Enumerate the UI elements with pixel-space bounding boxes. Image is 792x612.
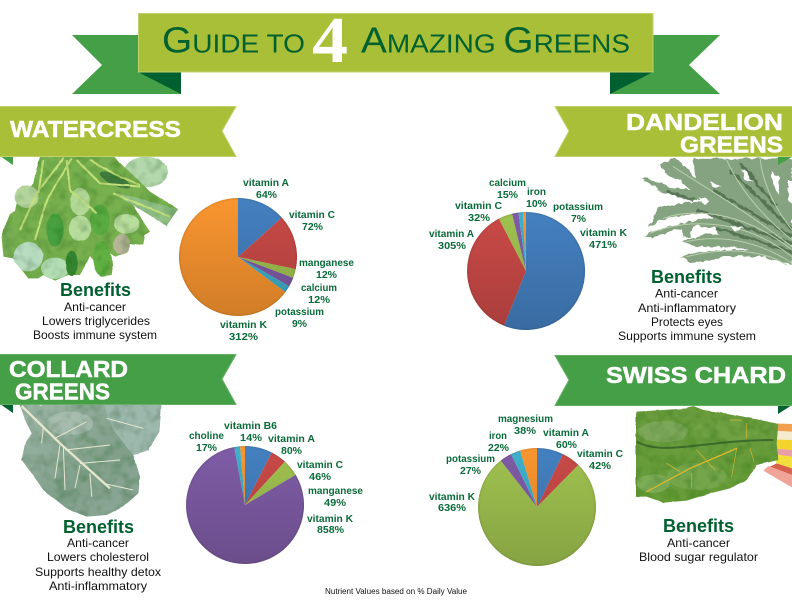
- banner: collard greens: [0, 354, 236, 413]
- title banner: [72, 4, 720, 94]
- banner: dandelion greens: DANDELION: [626, 109, 783, 135]
- pie labels: watercress: 12%: [316, 269, 338, 281]
- pie chart: collard greens: [186, 446, 304, 564]
- pie labels: dandelion greens: potassium: [553, 201, 603, 213]
- pie labels: swiss chard: 42%: [589, 460, 612, 472]
- pie labels: watercress: [220, 177, 354, 343]
- pie labels: dandelion greens: calcium: [489, 177, 526, 189]
- right ribbon tail: [610, 35, 720, 94]
- benefits: dandelion greens: Anti-cancer: [655, 286, 718, 300]
- pie chart: swiss chard: [478, 448, 596, 566]
- benefits: watercress: Lowers triglycerides: [42, 314, 150, 328]
- benefits: swiss chard: [639, 516, 758, 564]
- pie labels: collard greens: vitamin B6: [224, 420, 277, 432]
- photo: watercress: [2, 157, 178, 281]
- pie labels: swiss chard: iron: [489, 430, 507, 442]
- pie labels: collard greens: choline: [189, 430, 224, 442]
- banner: dandelion greens: GREENS: [680, 132, 783, 158]
- pie labels: watercress: vitamin A: [243, 177, 289, 189]
- pie labels: swiss chard: potassium: [446, 453, 495, 465]
- pie labels: watercress: 72%: [302, 221, 324, 233]
- benefits: collard greens: Benefits: [63, 517, 134, 537]
- left ribbon tail: [72, 35, 181, 94]
- pie labels: collard greens: manganese: [308, 485, 363, 497]
- benefits: collard greens: [35, 517, 161, 593]
- title text: [162, 4, 630, 77]
- pie labels: watercress: 312%: [229, 331, 259, 343]
- panel: dandelion greens: [429, 106, 792, 343]
- benefits: watercress: Benefits: [60, 280, 131, 300]
- pie labels: collard greens: vitamin K: [307, 513, 353, 525]
- pie labels: swiss chard: vitamin A: [543, 427, 589, 439]
- pie labels: dandelion greens: [429, 177, 627, 252]
- benefits: watercress: [33, 280, 157, 342]
- title text: GUIDE TO: [162, 20, 305, 60]
- pie labels: dandelion greens: 7%: [571, 213, 587, 225]
- benefits: watercress: Boosts immune system: [33, 328, 157, 342]
- title text: AMAZING GREENS: [361, 20, 630, 60]
- benefits: collard greens: Anti-cancer: [67, 536, 129, 550]
- panel: watercress: [0, 106, 354, 343]
- pie labels: dandelion greens: 10%: [526, 198, 548, 210]
- pie labels: swiss chard: 27%: [460, 465, 482, 477]
- pie labels: watercress: vitamin K: [220, 319, 267, 331]
- pie labels: dandelion greens: 15%: [497, 189, 519, 201]
- benefits: dandelion greens: Supports immune system: [618, 329, 756, 343]
- banner: collard greens: COLLARD: [9, 356, 128, 382]
- benefits: collard greens: Lowers cholesterol: [47, 550, 149, 564]
- pie labels: swiss chard: 636%: [438, 502, 467, 514]
- pie labels: dandelion greens: 305%: [438, 240, 467, 252]
- banner: watercress: [0, 106, 236, 165]
- pie labels: watercress: manganese: [299, 257, 354, 269]
- pie labels: dandelion greens: 32%: [468, 212, 491, 224]
- benefits: swiss chard: Anti-cancer: [667, 536, 730, 550]
- benefits: swiss chard: Blood sugar regulator: [639, 550, 758, 564]
- benefits: dandelion greens: Protects eyes: [651, 315, 723, 329]
- pie labels: watercress: 9%: [292, 318, 308, 330]
- pie chart: watercress: [179, 198, 297, 316]
- photo: collard greens: [20, 405, 161, 517]
- photo: dandelion greens: [642, 158, 792, 265]
- benefits: collard greens: Anti-inflammatory: [49, 579, 147, 593]
- pie labels: collard greens: vitamin C: [297, 459, 343, 471]
- panel: collard greens: [0, 354, 363, 593]
- banner: swiss chard: SWISS CHARD: [606, 362, 786, 388]
- pie labels: dandelion greens: 471%: [589, 239, 618, 251]
- icon: coloured stems: [763, 423, 792, 487]
- pie labels: watercress: calcium: [301, 282, 337, 294]
- benefits: watercress: Anti-cancer: [64, 300, 126, 314]
- pie labels: dandelion greens: vitamin A: [429, 228, 474, 240]
- title text: 4: [312, 4, 348, 77]
- pie labels: swiss chard: vitamin K: [429, 491, 475, 503]
- title plate: [138, 14, 653, 72]
- pie labels: collard greens: 49%: [324, 497, 347, 509]
- photo: swiss chard: [636, 406, 792, 503]
- pie labels: swiss chard: magnesium: [498, 413, 553, 425]
- pie labels: watercress: 64%: [256, 189, 278, 201]
- pie labels: swiss chard: 38%: [514, 425, 537, 437]
- pie labels: watercress: 12%: [308, 294, 331, 306]
- pie labels: collard greens: 80%: [281, 445, 303, 457]
- pie labels: collard greens: 17%: [196, 442, 218, 454]
- pie labels: swiss chard: 60%: [556, 439, 578, 451]
- pie labels: collard greens: 858%: [317, 524, 345, 536]
- pie labels: dandelion greens: iron: [527, 186, 546, 198]
- banner: watercress: WATERCRESS: [10, 116, 181, 142]
- pie labels: collard greens: 46%: [309, 471, 332, 483]
- pie labels: swiss chard: vitamin C: [577, 448, 623, 460]
- pie labels: collard greens: vitamin A: [268, 433, 315, 445]
- pie labels: dandelion greens: vitamin K: [580, 227, 627, 239]
- pie labels: watercress: potassium: [275, 306, 324, 318]
- pie labels: swiss chard: [429, 413, 623, 514]
- benefits: dandelion greens: Anti-inflammatory: [638, 301, 736, 315]
- benefits: collard greens: Supports healthy detox: [35, 565, 161, 579]
- benefits: swiss chard: Benefits: [663, 516, 734, 536]
- pie labels: collard greens: 14%: [240, 432, 263, 444]
- pie labels: swiss chard: 22%: [488, 442, 510, 454]
- pie labels: collard greens: [189, 420, 363, 536]
- footnote: Nutrient Values based on % Daily Value: [325, 587, 468, 596]
- banner: dandelion greens: [555, 106, 792, 165]
- pie chart: dandelion greens: [467, 212, 585, 330]
- pie labels: dandelion greens: vitamin C: [455, 200, 502, 212]
- pie labels: watercress: vitamin C: [289, 209, 335, 221]
- panel: swiss chard: [429, 356, 792, 566]
- benefits: dandelion greens: [618, 267, 756, 343]
- banner: swiss chard: [555, 356, 792, 414]
- banner: collard greens: GREENS: [15, 378, 110, 404]
- benefits: dandelion greens: Benefits: [651, 267, 722, 287]
